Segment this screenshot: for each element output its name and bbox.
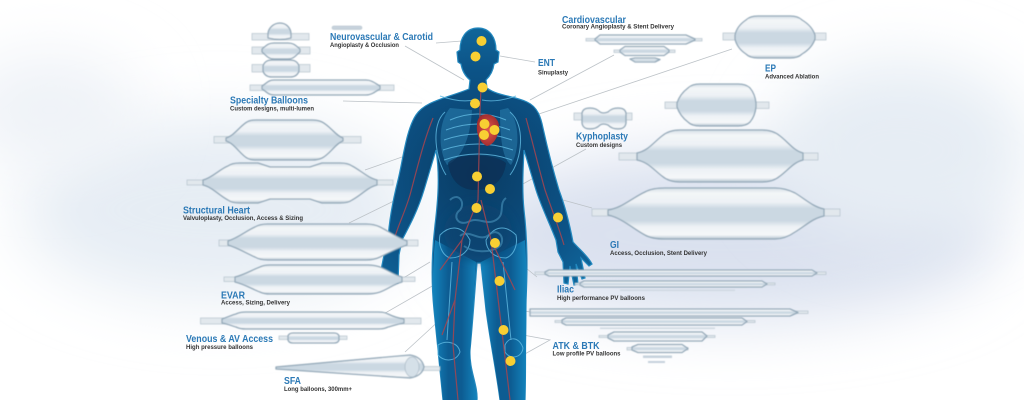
- label: ENT: ENT: [538, 57, 555, 69]
- veins and arteries: [394, 88, 564, 400]
- label: SFA: SFA: [284, 375, 301, 387]
- label: Kyphoplasty: Kyphoplasty: [576, 130, 628, 142]
- label: Venous & AV Access: High pressure balloons: [186, 344, 253, 351]
- label: Kyphoplasty: Custom designs: [576, 142, 622, 149]
- label: ENT: Sinuplasty: [538, 70, 568, 76]
- label: Iliac: [557, 284, 645, 302]
- intestines: [450, 197, 506, 251]
- label: SFA: [284, 375, 352, 393]
- label: Neurovascular & Carotid: [330, 31, 433, 49]
- ribcage and bones: [436, 96, 523, 360]
- balloon: small left F: [279, 333, 347, 343]
- label: Structural Heart: [183, 204, 303, 222]
- human body figure: [380, 28, 592, 400]
- label: Cardiovascular: [562, 14, 674, 30]
- balloon: large left C: [219, 224, 418, 260]
- label: EVAR: EVAR: [221, 290, 245, 302]
- label: Neurovascular & Carotid: Neurovascular & Carotid: [330, 31, 433, 43]
- balloon: kyphoplasty: [574, 108, 632, 129]
- label: Neurovascular & Carotid: Angioplasty & Occlusion: [330, 42, 399, 49]
- label: GI: GI: [610, 239, 619, 251]
- connector lines: [343, 41, 732, 355]
- hip region: [444, 204, 512, 260]
- balloon: EP: [723, 16, 826, 58]
- label: GI: [610, 239, 707, 257]
- balloons: specialty group: [250, 23, 394, 95]
- label: Specialty Balloons: Custom designs, multi-lumen: [230, 106, 314, 112]
- balloon: right 4: [592, 188, 840, 239]
- label: EVAR: Access, Sizing, Delivery: [221, 300, 290, 306]
- balloons: cardiovascular group: [586, 35, 702, 62]
- label: SFA: Long balloons, 300mm+: [284, 386, 352, 393]
- label: EP: Advanced Ablation: [765, 74, 819, 80]
- label: Iliac: Iliac: [557, 284, 574, 296]
- label: Venous & AV Access: [186, 333, 273, 351]
- label: EVAR: [221, 290, 290, 306]
- label: ATK & BTK: Low profile PV balloons: [552, 350, 621, 358]
- label: Cardiovascular: Coronary Angioplasty & Stent Delivery: [562, 24, 674, 30]
- stomach dark area: [448, 156, 506, 190]
- label: Structural Heart: Structural Heart: [183, 204, 250, 216]
- label: Specialty Balloons: [230, 94, 314, 112]
- balloon: right 3: [619, 130, 818, 182]
- heart: [477, 114, 499, 146]
- label: Structural Heart: Valvuloplasty, Occlusion, Access & Sizing: [183, 215, 303, 222]
- right leg tint: [481, 240, 527, 400]
- balloon: large left D: [224, 265, 415, 294]
- yellow target dots: [470, 36, 563, 366]
- label: Venous & AV Access: Venous & AV Access: [186, 333, 273, 345]
- balloon: SFA cone: [276, 355, 440, 378]
- body silhouette: [380, 28, 592, 400]
- left leg tint: [433, 240, 477, 400]
- label: ATK & BTK: ATK & BTK: [552, 340, 600, 352]
- label: Specialty Balloons: Specialty Balloons: [230, 94, 308, 106]
- label: EP: [765, 62, 819, 80]
- balloon: right 2: [665, 84, 769, 126]
- balloon: large left A: [214, 120, 361, 160]
- balloon: large left B: [187, 163, 393, 203]
- label: EP: EP: [765, 62, 776, 74]
- label: ENT: [538, 57, 568, 76]
- balloon: neurovascular small: [332, 26, 362, 30]
- label: Kyphoplasty: [576, 130, 628, 149]
- lungs: [441, 108, 517, 165]
- label: Iliac: High performance PV balloons: [557, 295, 645, 302]
- label: GI: Access, Occlusion, Stent Delivery: [610, 250, 707, 257]
- balloons: long PV group: [530, 270, 826, 363]
- label: Cardiovascular: Cardiovascular: [562, 14, 626, 26]
- label: ATK & BTK: [552, 340, 621, 358]
- balloon: long left E: [200, 312, 421, 329]
